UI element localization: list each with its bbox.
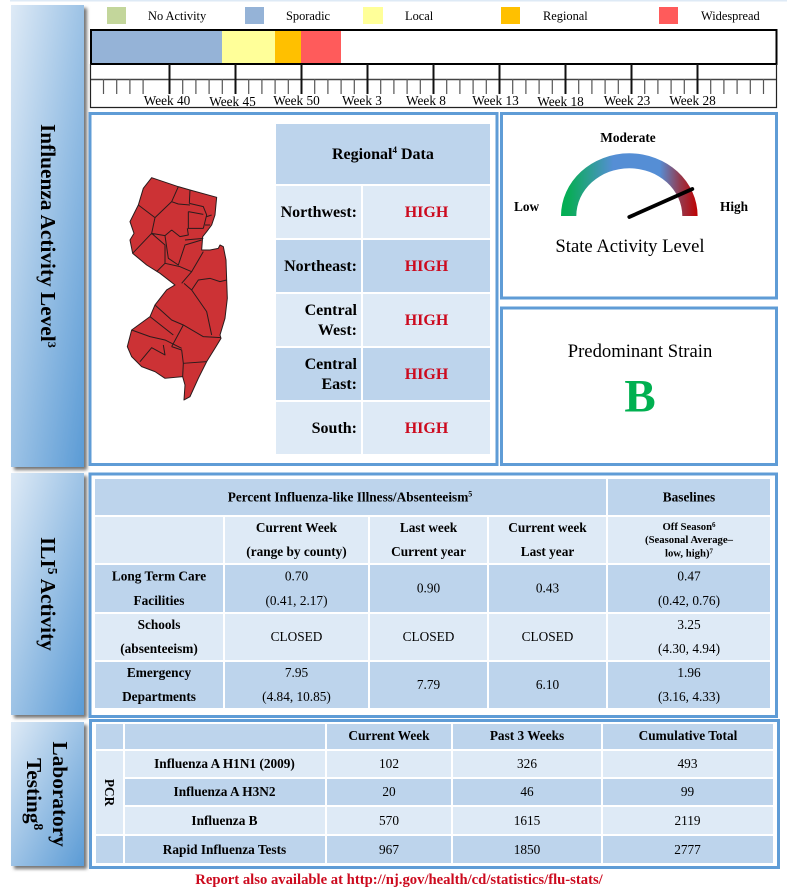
row: Influenza B: 570 — [379, 813, 399, 828]
header row — [96, 724, 773, 749]
row: schools: (4.30, 4.94) — [658, 641, 720, 656]
legend — [107, 7, 760, 24]
row: Northeast: Northeast: — [284, 258, 357, 275]
panel: state activity level gauge: High — [720, 199, 749, 214]
panel: state activity level gauge: Moderate — [600, 130, 656, 145]
footer link text: Report also available at http://nj.gov/health/cd/statistics/flu-stats/ — [195, 872, 604, 888]
timeline axis with week ticks: Week 50 — [273, 93, 320, 108]
column headings: 7 — [710, 548, 714, 556]
row: Central East: Central — [305, 356, 358, 373]
panel: laboratory testing table — [90, 720, 778, 868]
row: schools: CLOSED — [522, 629, 574, 644]
row: long term care facilities: 0.90 — [417, 580, 440, 596]
row: Central West: HIGH — [405, 312, 449, 329]
legend: No Activity — [148, 9, 207, 23]
timeline axis with week ticks: Week 45 — [209, 94, 256, 109]
row: Influenza B: Influenza B — [191, 813, 258, 828]
activity timeline bar — [91, 30, 776, 64]
sidebar: ILI activity: ILI — [36, 537, 60, 568]
row: Influenza A H3N2: Influenza A H3N2 — [174, 784, 276, 799]
panel: ILI activity table — [90, 474, 776, 716]
row: emergency departments — [95, 662, 770, 708]
row: Influenza B — [125, 807, 773, 834]
sidebar: laboratory testing: Testing — [22, 758, 46, 824]
column headings: Off Season — [662, 521, 712, 533]
regional table heading: 4 — [392, 145, 397, 155]
table: regional data — [276, 124, 490, 454]
row: schools: (absenteeism) — [120, 641, 198, 656]
map: New Jersey counties — [127, 178, 227, 400]
timeline axis with week ticks: Week 40 — [144, 93, 191, 108]
row: schools: CLOSED — [403, 629, 455, 644]
row: South: HIGH — [405, 420, 449, 437]
row: emergency departments: (3.16, 4.33) — [658, 689, 720, 704]
row: long term care facilities: Long Term Care — [112, 568, 206, 584]
row: Influenza A H3N2: 46 — [520, 784, 534, 799]
table header row: Percent Influenza-like Illness/Absenteeism — [228, 490, 468, 504]
header row: Past 3 Weeks — [490, 728, 564, 743]
row: rapid influenza tests: 2777 — [674, 842, 701, 857]
timeline axis with week ticks: Week 23 — [604, 93, 651, 108]
row: Influenza A H1N1 — [125, 751, 773, 777]
row: Influenza A H1N1: 493 — [678, 756, 698, 771]
row: Northwest — [276, 186, 490, 238]
column headings: Last week — [400, 520, 458, 535]
sidebar: ILI activity: Activity — [36, 575, 60, 651]
gauge arc — [561, 153, 698, 216]
row: Influenza A H1N1: 326 — [517, 756, 537, 771]
row: Central East — [276, 348, 490, 400]
column headings — [95, 517, 770, 563]
row: Influenza B: 1615 — [514, 813, 541, 828]
panel: predominant strain — [502, 308, 776, 464]
column headings: Current year — [391, 544, 466, 559]
header row: Current Week — [348, 728, 430, 743]
row: long term care facilities: Facilities — [134, 593, 184, 608]
row: Northwest: HIGH — [405, 204, 449, 221]
row: Central West — [276, 294, 490, 346]
timeline axis with week ticks: Week 8 — [406, 93, 446, 108]
row: Northwest: Northwest: — [281, 204, 357, 221]
legend: Widespread — [701, 9, 760, 23]
row: emergency departments: 7.95 — [285, 665, 308, 680]
row: South — [276, 402, 490, 454]
sidebar: ILI activity: 5 — [45, 568, 60, 575]
row: Influenza B: 2119 — [674, 813, 701, 828]
column headings: Current week — [508, 520, 587, 535]
header row: Cumulative Total — [639, 728, 738, 743]
PCR vertical label — [96, 751, 123, 834]
row: Influenza A H3N2: 99 — [681, 784, 694, 799]
row: long term care facilities: 0.47 — [677, 568, 701, 584]
timeline axis with week ticks: Week 13 — [472, 93, 519, 108]
row: South: South: — [312, 420, 357, 437]
table header row: Baselines — [663, 490, 715, 504]
row: Central West: Central — [305, 302, 358, 319]
column headings: low, high) — [665, 548, 710, 560]
row: emergency departments: Departments — [122, 689, 196, 704]
row: Influenza A H1N1: Influenza A H1N1 (2009) — [154, 756, 295, 771]
sidebar: influenza activity level: Influenza Activity Level — [36, 124, 60, 342]
sidebar: laboratory testing: Laboratory — [48, 742, 72, 847]
row: Northeast: HIGH — [405, 258, 449, 275]
gauge needle — [629, 189, 692, 217]
column headings: 6 — [712, 521, 716, 529]
column headings: (Seasonal Average– — [645, 534, 734, 546]
panel: state activity level gauge — [502, 114, 776, 298]
row: Influenza A H3N2: 20 — [382, 784, 396, 799]
sidebar: laboratory testing: 8 — [31, 824, 46, 830]
row: emergency departments: 1.96 — [677, 665, 701, 680]
row: long term care facilities: 0.70 — [285, 568, 308, 584]
sidebar: influenza activity level — [11, 5, 84, 467]
row: schools: CLOSED — [271, 629, 323, 644]
timeline axis with week ticks: Week 3 — [342, 93, 382, 108]
legend: Sporadic — [286, 9, 331, 23]
row: long term care facilities: 0.43 — [536, 580, 559, 596]
row: rapid influenza tests: 1850 — [514, 842, 541, 857]
regional table heading — [276, 124, 490, 184]
row: rapid influenza tests: 967 — [379, 842, 399, 857]
panel: predominant strain: B — [624, 370, 656, 422]
row: Influenza A H3N2 — [125, 779, 773, 805]
timeline axis with week ticks — [90, 64, 776, 109]
row: long term care facilities — [95, 565, 770, 612]
row: Central East: East: — [321, 376, 357, 393]
timeline axis with week ticks: Week 18 — [537, 94, 584, 109]
row: Influenza A H1N1: 102 — [379, 756, 399, 771]
row: schools — [95, 614, 770, 660]
column headings: (range by county) — [246, 544, 347, 559]
legend: Local — [405, 9, 434, 23]
panel: map and regional data — [90, 114, 497, 464]
row: long term care facilities: (0.41, 2.17) — [265, 593, 328, 608]
row: Central East: HIGH — [405, 366, 449, 383]
row: schools: 3.25 — [677, 617, 701, 632]
row: emergency departments: 7.79 — [417, 677, 440, 692]
sidebar: laboratory testing — [11, 722, 84, 866]
row: schools: Schools — [138, 617, 180, 632]
column headings: Current Week — [256, 520, 338, 535]
row: Central West: West: — [318, 322, 357, 339]
PCR vertical label: PCR — [102, 779, 117, 807]
panel: predominant strain: Predominant Strain — [568, 341, 713, 362]
regional table heading: Regional — [332, 146, 392, 163]
legend: Regional — [543, 9, 588, 23]
row: Northeast — [276, 240, 490, 292]
sidebar: influenza activity level: 3 — [45, 342, 59, 348]
column headings: Last year — [521, 544, 574, 559]
table header row — [95, 479, 770, 515]
row: emergency departments: Emergency — [127, 665, 191, 680]
row: emergency departments: 6.10 — [536, 677, 559, 692]
regional table heading: Data — [397, 146, 434, 163]
row: emergency departments: (4.84, 10.85) — [262, 689, 331, 704]
row: rapid influenza tests: Rapid Influenza Tests — [163, 842, 286, 857]
row: rapid influenza tests — [96, 836, 773, 863]
panel: state activity level gauge: State Activity Level — [555, 236, 705, 257]
sidebar: ILI activity — [11, 473, 84, 715]
panel: state activity level gauge: Low — [514, 199, 540, 214]
timeline axis with week ticks: Week 28 — [669, 93, 716, 108]
row: long term care facilities: (0.42, 0.76) — [658, 593, 720, 608]
table header row: 5 — [468, 490, 472, 498]
